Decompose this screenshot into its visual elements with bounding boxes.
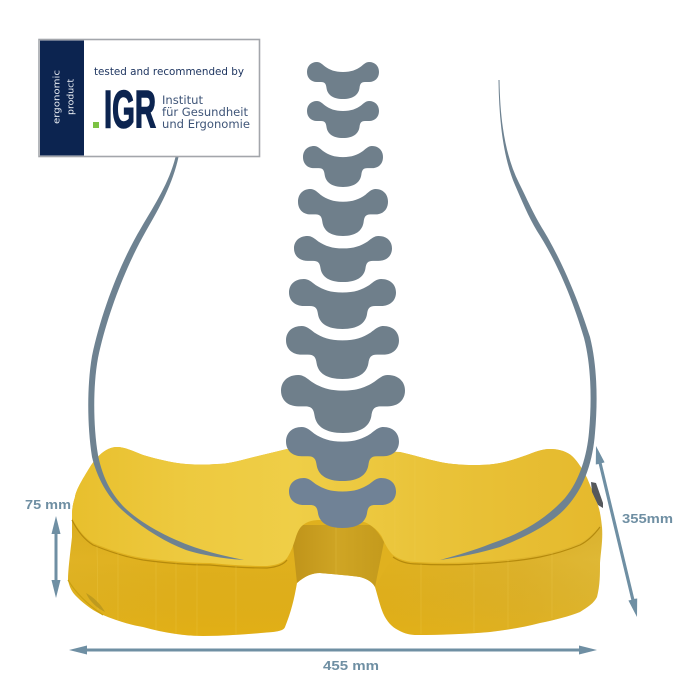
badge side text: ergonomic (52, 70, 62, 124)
cushion lower rim (68, 580, 103, 615)
badge side text: product (66, 79, 76, 115)
certification badge (39, 40, 260, 156)
seat cushion (68, 447, 603, 636)
cushion side label tag (591, 482, 603, 508)
vertebra 3 (303, 146, 383, 187)
vertebra 1 (307, 62, 379, 99)
cushion centre notch (293, 525, 384, 587)
IGR logo: IGR (104, 80, 156, 140)
vertebra 4 (298, 189, 388, 236)
IGR logo (93, 80, 156, 140)
height label: 75 mm (25, 497, 71, 512)
cushion corner flap (86, 593, 105, 612)
cushion side shading (68, 518, 602, 636)
vertebra 5 (294, 236, 392, 282)
vertebra 6 (289, 279, 396, 329)
cushion top surface (72, 447, 600, 566)
spine (281, 62, 405, 528)
institute name: und Ergonomie (162, 117, 250, 131)
right body contour line (440, 80, 597, 560)
dimension: width 455 mm (69, 646, 597, 673)
width arrow (69, 646, 597, 654)
cushion fabric lines (97, 450, 552, 636)
institute name: Institut (162, 93, 203, 107)
height arrow (52, 516, 60, 598)
cushion body (68, 447, 602, 636)
badge side text (52, 70, 76, 124)
badge navy side panel (40, 40, 84, 156)
dimension: height 75 mm (25, 497, 71, 598)
left body contour line (88, 157, 244, 560)
cushion seam (72, 520, 600, 568)
institute name: für Gesundheit (162, 105, 248, 119)
vertebra 7 (286, 326, 399, 379)
vertebra 8 (281, 375, 405, 433)
width label: 455 mm (323, 658, 379, 673)
institute name (162, 93, 250, 131)
depth label: 355mm (622, 511, 673, 526)
vertebra 9 (286, 427, 399, 481)
dimension: depth 355 mm (596, 446, 673, 617)
badge frame (39, 40, 260, 156)
vertebra 2 (307, 101, 379, 138)
vertebra 10 (289, 478, 396, 528)
depth arrow (596, 446, 637, 617)
badge heading: tested and recommended by (94, 66, 244, 78)
